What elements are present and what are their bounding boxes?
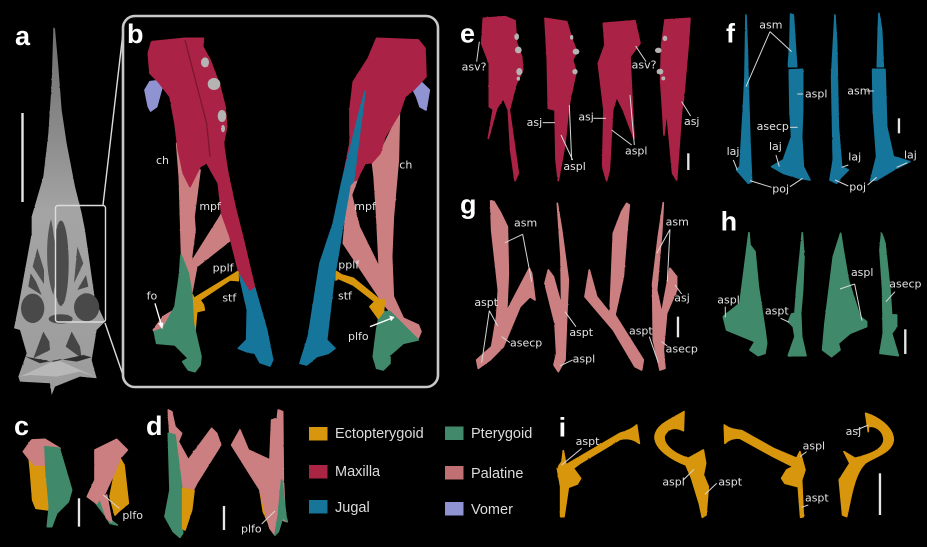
left palate bones [145, 38, 273, 372]
panel b frame [123, 16, 438, 387]
scale bar g [674, 317, 681, 337]
scale bar f [895, 118, 902, 133]
labels for panel b: pplf [338, 258, 360, 271]
panel h labels [717, 266, 922, 322]
panel f labels: asecp [757, 120, 789, 133]
panel letter i: i [559, 413, 566, 443]
panel h labels: aspl [851, 266, 873, 279]
panel e labels: asj [527, 116, 542, 129]
legend: maxilla [309, 464, 381, 480]
panel c label and scale bar: plfo [122, 509, 143, 522]
panel e labels: aspl [625, 145, 647, 158]
palatine views [477, 201, 677, 372]
labels for panel b [147, 154, 412, 343]
legend: vomer: Vomer [471, 502, 513, 518]
panel h: pterygoid [717, 207, 922, 357]
labels for panel b: fo [147, 289, 158, 302]
panel g labels: asecp [510, 337, 542, 350]
panel letter a: a [15, 21, 31, 51]
zoom box [56, 206, 106, 322]
panel e: maxilla [460, 17, 699, 181]
panel f labels: laj [848, 151, 861, 164]
panel e labels: aspl [563, 160, 586, 173]
panel i labels: asj [846, 425, 861, 438]
jugal views [737, 13, 910, 183]
panel d label and scale bar: plfo [241, 523, 262, 536]
panel f labels: asm [847, 85, 870, 98]
skull [14, 27, 105, 395]
panel c: ectopterygoid-palatine-pterygoid contact [14, 411, 143, 527]
labels for panel b: stf [222, 292, 237, 305]
legend [309, 426, 532, 518]
panel letter e: e [460, 18, 475, 48]
panel d bones [165, 410, 287, 537]
ectopterygoid views [557, 412, 893, 517]
panel i labels: aspt [718, 476, 743, 489]
panel e labels: asv? [462, 61, 487, 74]
panel f labels: poj [849, 181, 866, 194]
panel e labels: asv? [632, 58, 657, 71]
labels for panel b: mpf [354, 200, 377, 213]
panel f labels: asm [759, 18, 782, 31]
scale bar e [685, 153, 692, 170]
panel g labels [474, 215, 698, 366]
panel f: jugal [726, 13, 917, 196]
panel e labels [462, 42, 699, 173]
panel g labels: aspl [573, 352, 595, 365]
legend: maxilla: Maxilla [335, 464, 381, 480]
panel g labels: asm [666, 215, 689, 228]
legend: ectopterygoid: Ectopterygoid [335, 426, 424, 442]
panel a: skull in ventral view [14, 21, 124, 395]
panel g labels: asm [514, 217, 537, 230]
panel f labels: laj [904, 148, 917, 161]
labels for panel b: ch [156, 154, 169, 167]
legend: jugal: Jugal [335, 500, 370, 516]
panel c bones [23, 439, 128, 527]
panel h labels: aspt [765, 304, 789, 317]
zoom connector lines [103, 24, 124, 378]
panel f labels: aspl [805, 87, 827, 100]
legend: jugal [309, 500, 370, 516]
panel f labels [727, 18, 917, 196]
labels for panel b: mpf [199, 200, 222, 213]
panel d label and scale bar [224, 506, 275, 536]
panel i labels: aspl [662, 476, 685, 489]
panel letter c: c [14, 411, 29, 441]
panel f labels: laj [727, 145, 739, 158]
labels for panel b: stf [338, 289, 353, 302]
panel letter h: h [721, 207, 737, 237]
legend: palatine [445, 466, 523, 482]
panel i labels: aspl [803, 439, 825, 452]
legend: vomer [445, 502, 513, 518]
panel f labels: laj [769, 140, 782, 153]
scale bar h [902, 329, 909, 354]
panel e labels: asj [684, 115, 699, 128]
panel g: palatine [460, 189, 698, 372]
panel f labels: poj [772, 183, 789, 196]
panel i labels [562, 425, 868, 507]
panel b: palate in dorsal and ventral views [123, 16, 438, 387]
panel g labels: asecp [666, 343, 698, 356]
panel g labels: asj [674, 292, 690, 305]
labels for panel b: plfo [348, 330, 369, 343]
panel i: ectopterygoid [557, 412, 893, 517]
legend: palatine: Palatine [471, 466, 523, 482]
labels for panel b: ch [399, 159, 412, 172]
panel h labels: asecp [889, 277, 922, 290]
labels for panel b: pplf [213, 262, 235, 275]
panel g labels: aspt [629, 325, 653, 338]
panel g labels: aspt [474, 296, 499, 309]
panel g labels: aspt [569, 326, 594, 339]
panel h labels: aspl [717, 293, 740, 306]
panel i labels: aspt [576, 435, 600, 448]
panel e labels: asj [578, 111, 594, 124]
panel letter d: d [146, 411, 162, 441]
scale bar i [876, 473, 883, 515]
panel d: ectopterygoid-palatine-pterygoid contact, second view [146, 410, 287, 537]
panel letter f: f [726, 18, 736, 48]
panel letter b: b [127, 19, 144, 49]
scale bar a [21, 113, 24, 202]
right palate bones [300, 38, 429, 370]
legend: pterygoid: Pterygoid [471, 426, 532, 442]
panel i labels: aspt [805, 492, 829, 505]
pterygoid views [723, 233, 898, 357]
maxilla views [482, 17, 690, 181]
panel letter g: g [460, 189, 476, 219]
